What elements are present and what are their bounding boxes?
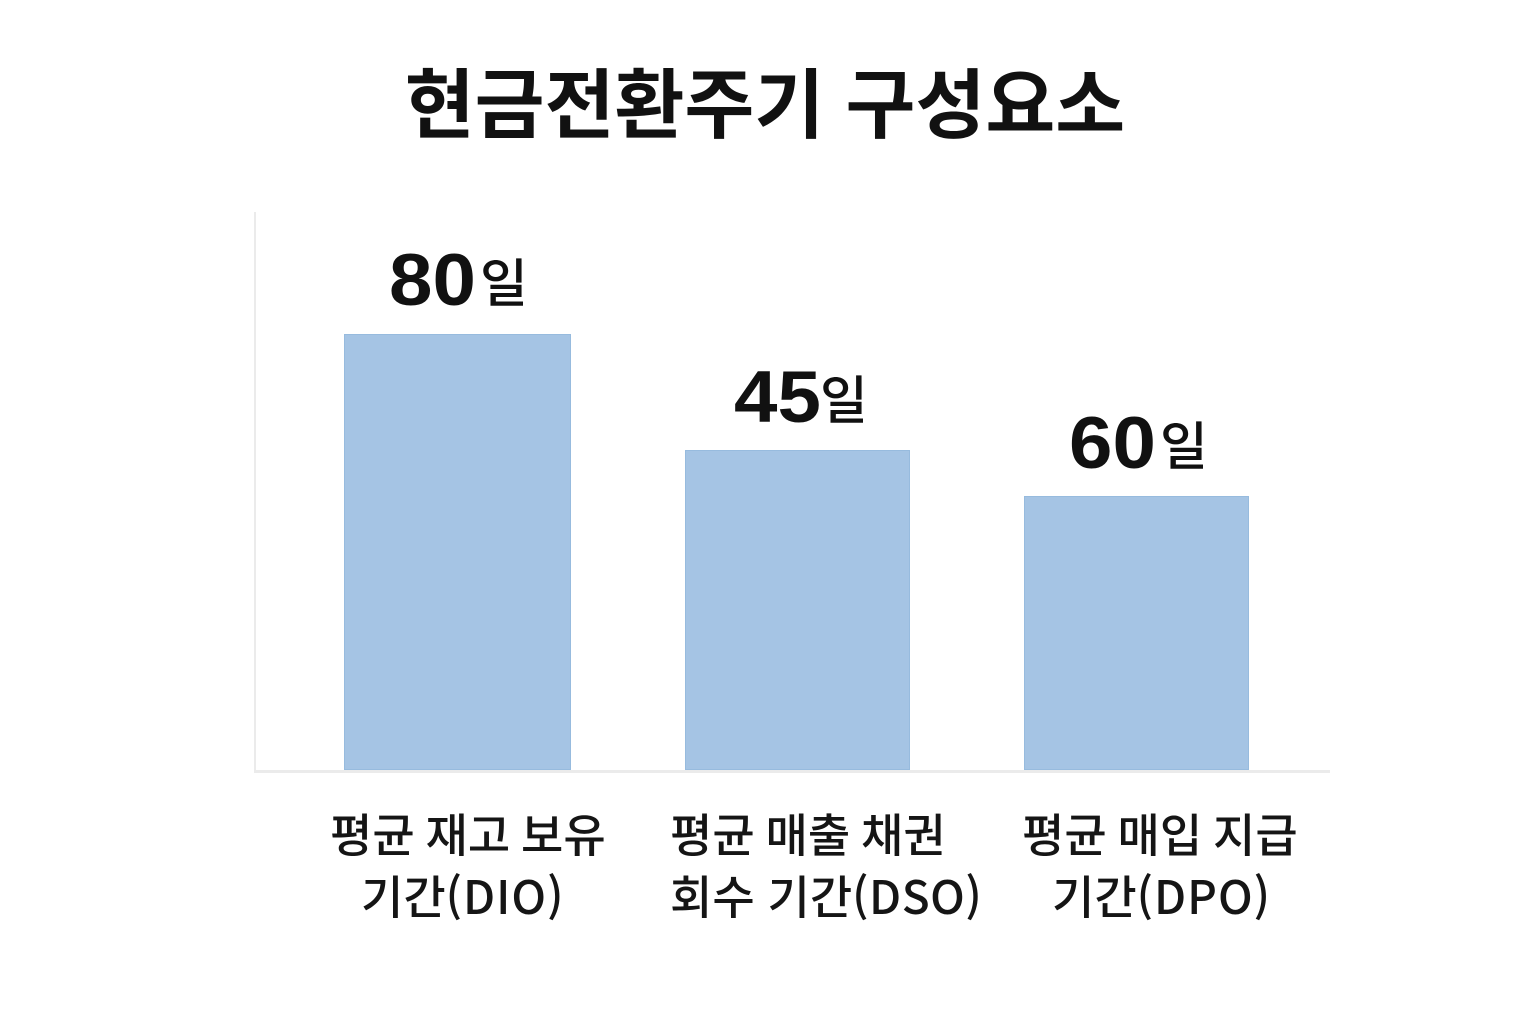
- value label: 60일: [1069, 403, 1208, 484]
- category label: DPO: [1022, 800, 1298, 928]
- value label: 60일: 일: [1160, 405, 1208, 480]
- y axis: [254, 212, 256, 772]
- category label: DIO: 기간(DIO): [361, 862, 564, 928]
- category label: DSO: [670, 800, 982, 928]
- bar: DIO 80 days: [344, 334, 571, 770]
- x axis: [254, 770, 1330, 773]
- bar chart: [254, 212, 1330, 773]
- value label: 45일: [734, 357, 868, 438]
- value label: 60일: 60: [1069, 403, 1156, 484]
- value label: 80일: 80: [389, 240, 476, 321]
- category label: DIO: [330, 800, 606, 928]
- value label: 80일: [389, 240, 528, 321]
- category label: DPO: 평균 매입 지급: [1022, 800, 1298, 866]
- category label: DSO: 평균 매출 채권: [670, 800, 946, 866]
- value label: 45일: 일: [820, 359, 868, 434]
- bar: DSO 45 days: [685, 450, 910, 770]
- title: 현금전환주기 구성요소: [405, 44, 1125, 154]
- category label: DSO: 회수 기간(DSO): [670, 862, 982, 928]
- bar: DPO 60 days: [1024, 496, 1249, 770]
- value label: 80일: 일: [480, 242, 528, 317]
- category label: DPO: 기간(DPO): [1052, 862, 1271, 928]
- category label: DIO: 평균 재고 보유: [330, 800, 606, 866]
- value label: 45일: 45: [734, 357, 821, 438]
